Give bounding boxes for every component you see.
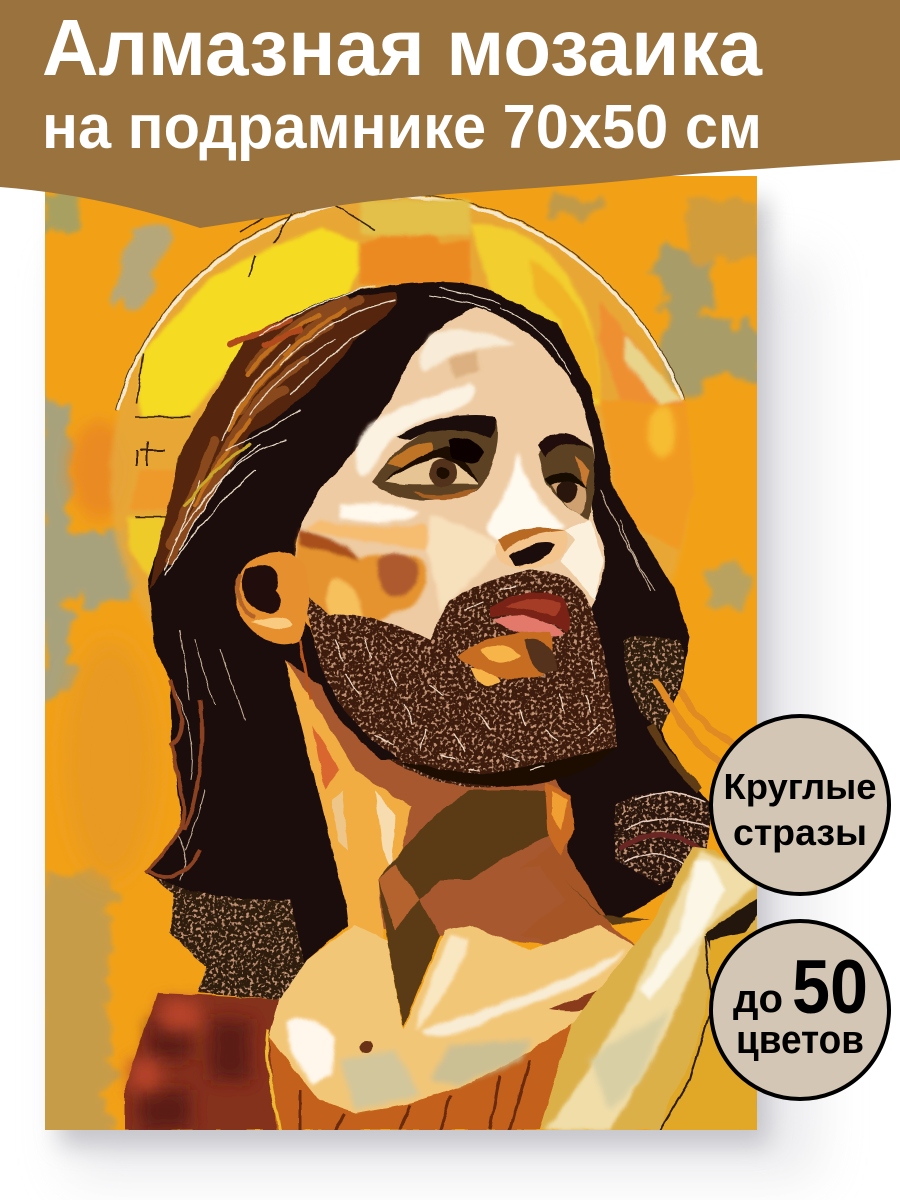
robe folds <box>300 1060 530 1130</box>
hair <box>146 282 757 1000</box>
face <box>295 307 604 680</box>
hair: brown strands <box>165 285 655 880</box>
neck: lit strip <box>285 660 411 1030</box>
right eye socket <box>538 437 595 520</box>
cloth right <box>540 847 757 1130</box>
halo: yellow panels <box>128 200 694 585</box>
right eye <box>551 482 586 514</box>
beard strands <box>335 586 600 772</box>
badge: up to 50 colours: цветов <box>736 1018 864 1062</box>
painting <box>30 160 770 1150</box>
badge: up to 50 colours: 50 <box>792 945 868 1030</box>
badge: round rhinestones: стразы <box>733 812 867 853</box>
badge: round rhinestones <box>711 716 889 894</box>
badge: round rhinestones: Круглые <box>724 766 876 807</box>
left eye socket <box>372 417 497 500</box>
painting background <box>30 160 770 1150</box>
neck: right highlight <box>545 782 574 855</box>
mouth <box>490 592 570 633</box>
beard <box>300 570 617 788</box>
title: Алмазная мозаика <box>42 3 762 92</box>
nose <box>488 452 565 541</box>
robe left <box>125 993 283 1130</box>
subtitle: на подрамнике 70х50 см <box>42 93 762 162</box>
ear <box>235 552 310 700</box>
chin patch <box>457 632 553 678</box>
forehead highlight <box>420 330 515 372</box>
left eye <box>385 455 478 485</box>
neck: olive shadow <box>378 790 560 1027</box>
neck <box>285 660 650 1030</box>
banner <box>0 0 900 228</box>
chest <box>269 925 644 1113</box>
robe centre <box>269 1023 572 1130</box>
hair: brown upper lobe <box>150 292 398 590</box>
hair: lower left brown curl <box>150 875 305 1000</box>
hair: lower right curls <box>615 792 712 885</box>
badge: up to 50 colours <box>711 921 889 1099</box>
badge: up to 50 colours: до <box>733 977 783 1021</box>
cheek <box>296 503 500 650</box>
canvas drop shadow <box>60 200 815 1175</box>
halo <box>108 195 694 636</box>
